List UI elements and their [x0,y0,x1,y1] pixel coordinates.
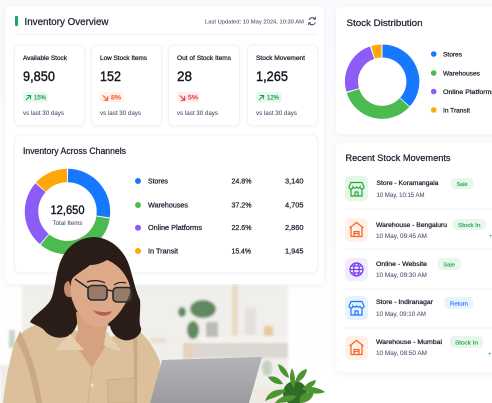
row: warehouse mumbai: 10 May, 08:50 AM [376,351,427,357]
row: store indiranagar [345,296,473,320]
panel: inventory overview [5,6,324,284]
icon: blue store [345,296,368,320]
ear [64,281,73,297]
stat card: out of stock items: 28 [177,68,192,84]
stat card: available stock: vs last 30 days [23,111,64,117]
row: online website: Sale [443,262,455,268]
stat card: out of stock items [168,45,240,126]
legend row: in transit [135,248,304,256]
panel: recent stock movements [336,143,492,372]
legend: distribution: Warehouses [443,70,481,77]
mouth [93,310,112,316]
stat card: low stock items [92,45,162,126]
legend row: warehouses: 37.2% [232,202,252,210]
icon: green store [345,176,368,201]
donut centre total: Total Items [52,221,82,227]
donut centre total: 12,650 [50,203,85,217]
stat card: out of stock items: 5% [188,96,199,102]
title: inventory overview: Inventory Overview [24,17,109,28]
heading: stock distribution: Stock Distribution [346,18,422,29]
legend row: stores: 24.8% [232,178,252,186]
panel: inventory across channels [14,135,318,273]
row: warehouse mumbai: + [488,352,492,358]
stat card: available stock: 9,850 [23,68,55,84]
legend row: in transit: 1,945 [285,248,304,256]
row: store indiranagar: 10 May, 09:10 AM [376,312,426,318]
stat card: out of stock items: vs last 30 days [177,111,218,117]
legend: distribution [431,51,492,114]
stat card: stock movement: 1,265 [256,68,288,84]
legend row: online platforms: 2,860 [285,225,304,232]
row: store koramangala: Sale [456,182,468,188]
icon: orange warehouse [345,218,368,242]
icon: purple globe [345,258,368,281]
row: warehouse mumbai: Warehouse - Mumbai [376,339,442,346]
stat card: low stock items: vs last 30 days [100,111,141,117]
legend row: warehouses: Warehouses [148,202,189,210]
legend row: warehouses: 4,705 [285,202,304,210]
shirt pocket and button [88,368,135,403]
row: warehouse mumbai [345,336,492,360]
stat card: stock movement [248,45,318,126]
legend row: in transit: 15.4% [232,248,251,256]
row: warehouse bengaluru [345,218,492,242]
shirt [3,323,160,403]
legend row: stores [135,178,304,186]
icon: refresh [309,17,316,25]
row: warehouse bengaluru: 10 May, 09:45 AM [376,234,427,240]
heading: inventory across channels: Inventory Across Channels [23,146,126,156]
neck [74,312,110,368]
last updated timestamp: Last Updated: 10 May 2024, 10:30 AM [205,20,304,26]
legend row: online platforms: Online Platforms [148,225,203,232]
stat card: low stock items: 8% [111,96,122,102]
row: store indiranagar: Return [450,301,468,307]
row: online website: 10 May, 09:30 AM [376,273,427,279]
heading: recent stock movements: Recent Stock Movements [346,153,451,164]
row: store koramangala [345,176,474,201]
row: store koramangala: 10 May, 10:15 AM [376,193,424,199]
row: online website [345,258,461,281]
donut centre total [50,203,85,227]
row: warehouse bengaluru: Warehouse - Bengaluru [376,222,448,229]
collar [55,330,122,352]
legend: distribution: Stores [443,51,463,58]
legend row: online platforms [135,225,304,232]
icon: orange warehouse [345,336,368,360]
stat card: available stock: 15% [34,96,47,102]
row: warehouse bengaluru: Stock In [458,223,480,229]
stat card: available stock: Available Stock [23,56,68,62]
stat card: stock movement: 12% [267,96,280,102]
legend row: warehouses [135,202,304,210]
legend row: online platforms: 22.6% [232,225,252,232]
background: blurred room [0,285,288,403]
row: online website: Online - Website [376,261,428,268]
laptop [150,357,262,403]
stat card: stock movement: Stock Movement [256,56,305,62]
legend: distribution: Online Platforms [443,89,492,96]
legend row: in transit: In Transit [148,248,178,256]
legend row: stores: Stores [148,178,168,186]
row: store indiranagar: Store - Indiranagar [376,299,433,306]
hair [30,237,141,340]
row: store koramangala: Store - Koramangala [376,180,439,187]
panel: stock distribution [336,7,492,134]
stat card: available stock [14,45,84,126]
donut chart: channels [32,176,103,248]
stat card: low stock items: Low Stock Items [100,56,147,62]
stat card: stock movement: vs last 30 days [256,111,297,117]
icon: glasses [75,279,132,302]
foreground plant [265,364,325,403]
donut chart: distribution [351,51,413,112]
legend row: stores: 3,140 [285,178,304,186]
stat card: low stock items: 152 [100,68,121,84]
eyebrows [87,281,126,285]
photo: woman working on laptop [3,237,325,403]
face [70,260,130,327]
row: warehouse mumbai: Stock In [455,340,478,346]
legend: distribution: In Transit [443,107,470,114]
stat card: out of stock items: Out of Stock Items [177,56,231,62]
